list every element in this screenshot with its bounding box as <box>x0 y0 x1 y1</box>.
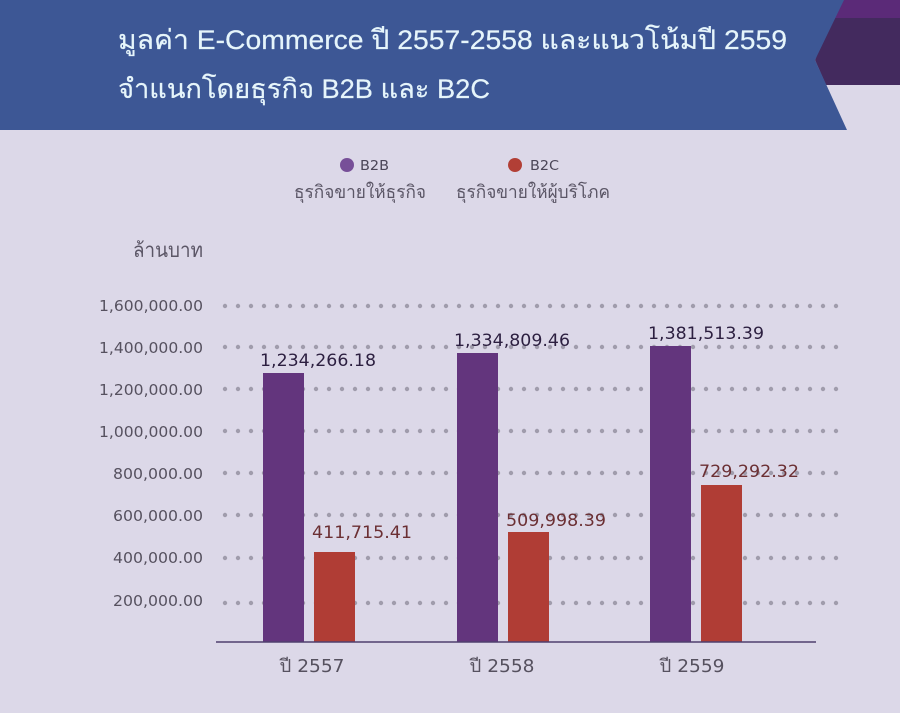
value labels B2B: 1,334,809.46 <box>454 331 570 351</box>
title: จำแนกโดยธุรกิจ B2B และ B2C <box>118 74 490 106</box>
y-axis labels <box>99 297 203 610</box>
legend: B2B: ธุรกิจขายให้ธุรกิจ <box>294 181 426 203</box>
y-axis labels: 200,000.00 <box>113 592 203 610</box>
header banner <box>0 0 847 130</box>
x-axis labels <box>279 656 724 677</box>
value labels B2C: 411,715.41 <box>312 523 412 543</box>
y-axis labels: 400,000.00 <box>113 549 203 567</box>
y-axis labels: 600,000.00 <box>113 507 203 525</box>
y-axis labels: 1,600,000.00 <box>99 297 203 315</box>
value labels B2B: 1,234,266.18 <box>260 351 376 371</box>
y-axis labels: 1,200,000.00 <box>99 381 203 399</box>
y-axis labels: 1,400,000.00 <box>99 339 203 357</box>
legend: B2C <box>456 158 610 203</box>
x axis line <box>216 641 816 643</box>
value labels B2C <box>312 462 799 543</box>
legend: B2B: B2B <box>360 158 389 174</box>
y-axis labels: 1,000,000.00 <box>99 423 203 441</box>
x-axis labels: ปี 2557 <box>279 656 344 677</box>
value labels B2C: 729,292.32 <box>699 462 799 482</box>
legend <box>294 158 610 203</box>
bars 2559 <box>650 346 742 642</box>
x-axis labels: ปี 2558 <box>469 656 534 677</box>
bars 2558 <box>457 353 549 642</box>
legend: B2C: ธุรกิจขายให้ผู้บริโภค <box>456 181 610 203</box>
bars 2557 <box>263 373 355 642</box>
header decoration: purple ribbon <box>815 0 900 85</box>
value labels B2B: 1,381,513.39 <box>648 324 764 344</box>
legend: B2C: B2C <box>530 158 559 174</box>
value labels B2B <box>260 324 764 371</box>
title: มูลค่า E-Commerce ปี 2557-2558 และแนวโน้มปี 2559 <box>118 25 787 56</box>
legend: B2B <box>294 158 426 203</box>
y-axis unit: ล้านบาท <box>133 238 203 262</box>
bar chart <box>216 346 816 642</box>
title <box>118 25 787 106</box>
value labels B2C: 509,998.39 <box>506 511 606 531</box>
y-axis labels: 800,000.00 <box>113 465 203 483</box>
x-axis labels: ปี 2559 <box>659 656 724 677</box>
dotted grid lines <box>225 306 838 603</box>
